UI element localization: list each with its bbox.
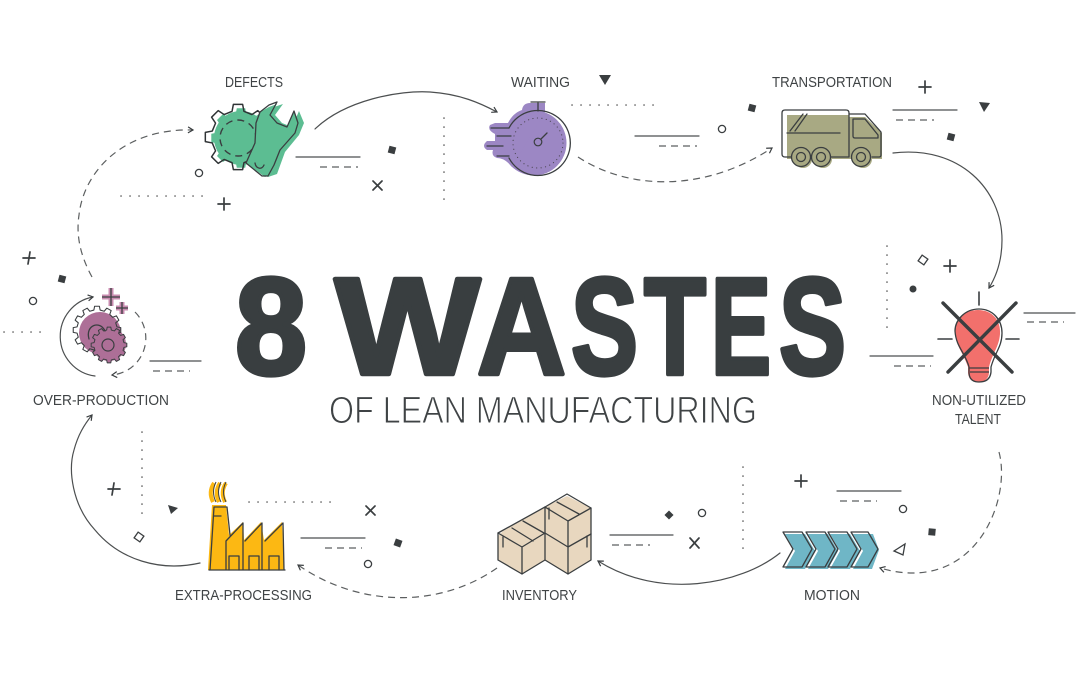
label: transportation: TRANSPORTATION bbox=[772, 75, 892, 91]
icon: defects gear and wrench bbox=[205, 102, 304, 177]
label: motion: MOTION bbox=[804, 588, 860, 604]
icon: inventory boxes bbox=[498, 494, 591, 574]
icon: transportation truck bbox=[782, 110, 882, 168]
label: non-utilized talent: TALENT bbox=[955, 412, 1001, 428]
arrow: defects to waiting bbox=[315, 92, 497, 129]
arrow: waiting to transportation bbox=[578, 148, 772, 182]
arrow: extra-processing to over-production bbox=[72, 415, 200, 566]
arrow: non-utilized talent to motion bbox=[880, 452, 1002, 573]
label: extra-processing: EXTRA-PROCESSING bbox=[175, 588, 312, 604]
icon: extra-processing factory bbox=[208, 482, 285, 570]
icon: motion chevrons bbox=[783, 532, 879, 569]
subtitle: OF LEAN MANUFACTURING bbox=[329, 390, 757, 432]
label: non-utilized talent: NON-UTILIZED bbox=[932, 393, 1026, 409]
title: T bbox=[644, 250, 706, 404]
label: inventory: INVENTORY bbox=[502, 588, 577, 604]
label: waiting: WAITING bbox=[511, 75, 570, 91]
arrow: inventory to extra-processing bbox=[298, 565, 497, 598]
icon: non-utilized talent crossed light bulb bbox=[938, 292, 1019, 382]
title: 8 bbox=[235, 250, 307, 404]
title: W bbox=[335, 250, 481, 404]
title: S bbox=[779, 250, 846, 404]
title: A bbox=[477, 250, 566, 404]
title: E bbox=[711, 250, 771, 404]
icon: waiting stopwatch bbox=[484, 102, 570, 176]
label: over-production: OVER-PRODUCTION bbox=[33, 393, 169, 409]
icon: over-production gears bbox=[60, 288, 146, 376]
arrow: transportation to non-utilized talent bbox=[893, 152, 1002, 288]
arrow: over-production to defects bbox=[78, 130, 193, 277]
arrow: motion to inventory bbox=[598, 553, 780, 584]
title: S bbox=[571, 250, 638, 404]
labels: defects: DEFECTS bbox=[225, 75, 283, 91]
